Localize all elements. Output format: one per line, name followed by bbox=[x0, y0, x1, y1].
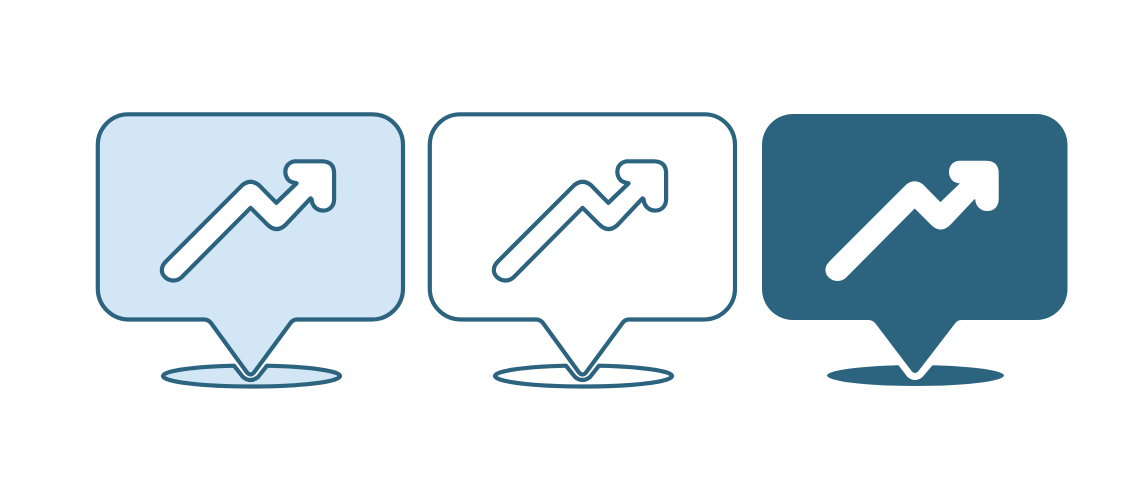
arrow bbox=[494, 161, 666, 280]
ground ellipse bbox=[495, 366, 672, 386]
ground ellipse bbox=[827, 365, 1004, 386]
bubble bbox=[98, 114, 403, 375]
icon: light blue pin bbox=[98, 114, 403, 386]
icon: white pin bbox=[430, 114, 735, 386]
arrow bbox=[162, 161, 334, 280]
ground ellipse bbox=[163, 366, 340, 386]
arrow bbox=[826, 161, 998, 280]
bubble bbox=[430, 114, 735, 375]
icon: dark blue pin bbox=[762, 114, 1068, 386]
bubble bbox=[762, 114, 1068, 373]
